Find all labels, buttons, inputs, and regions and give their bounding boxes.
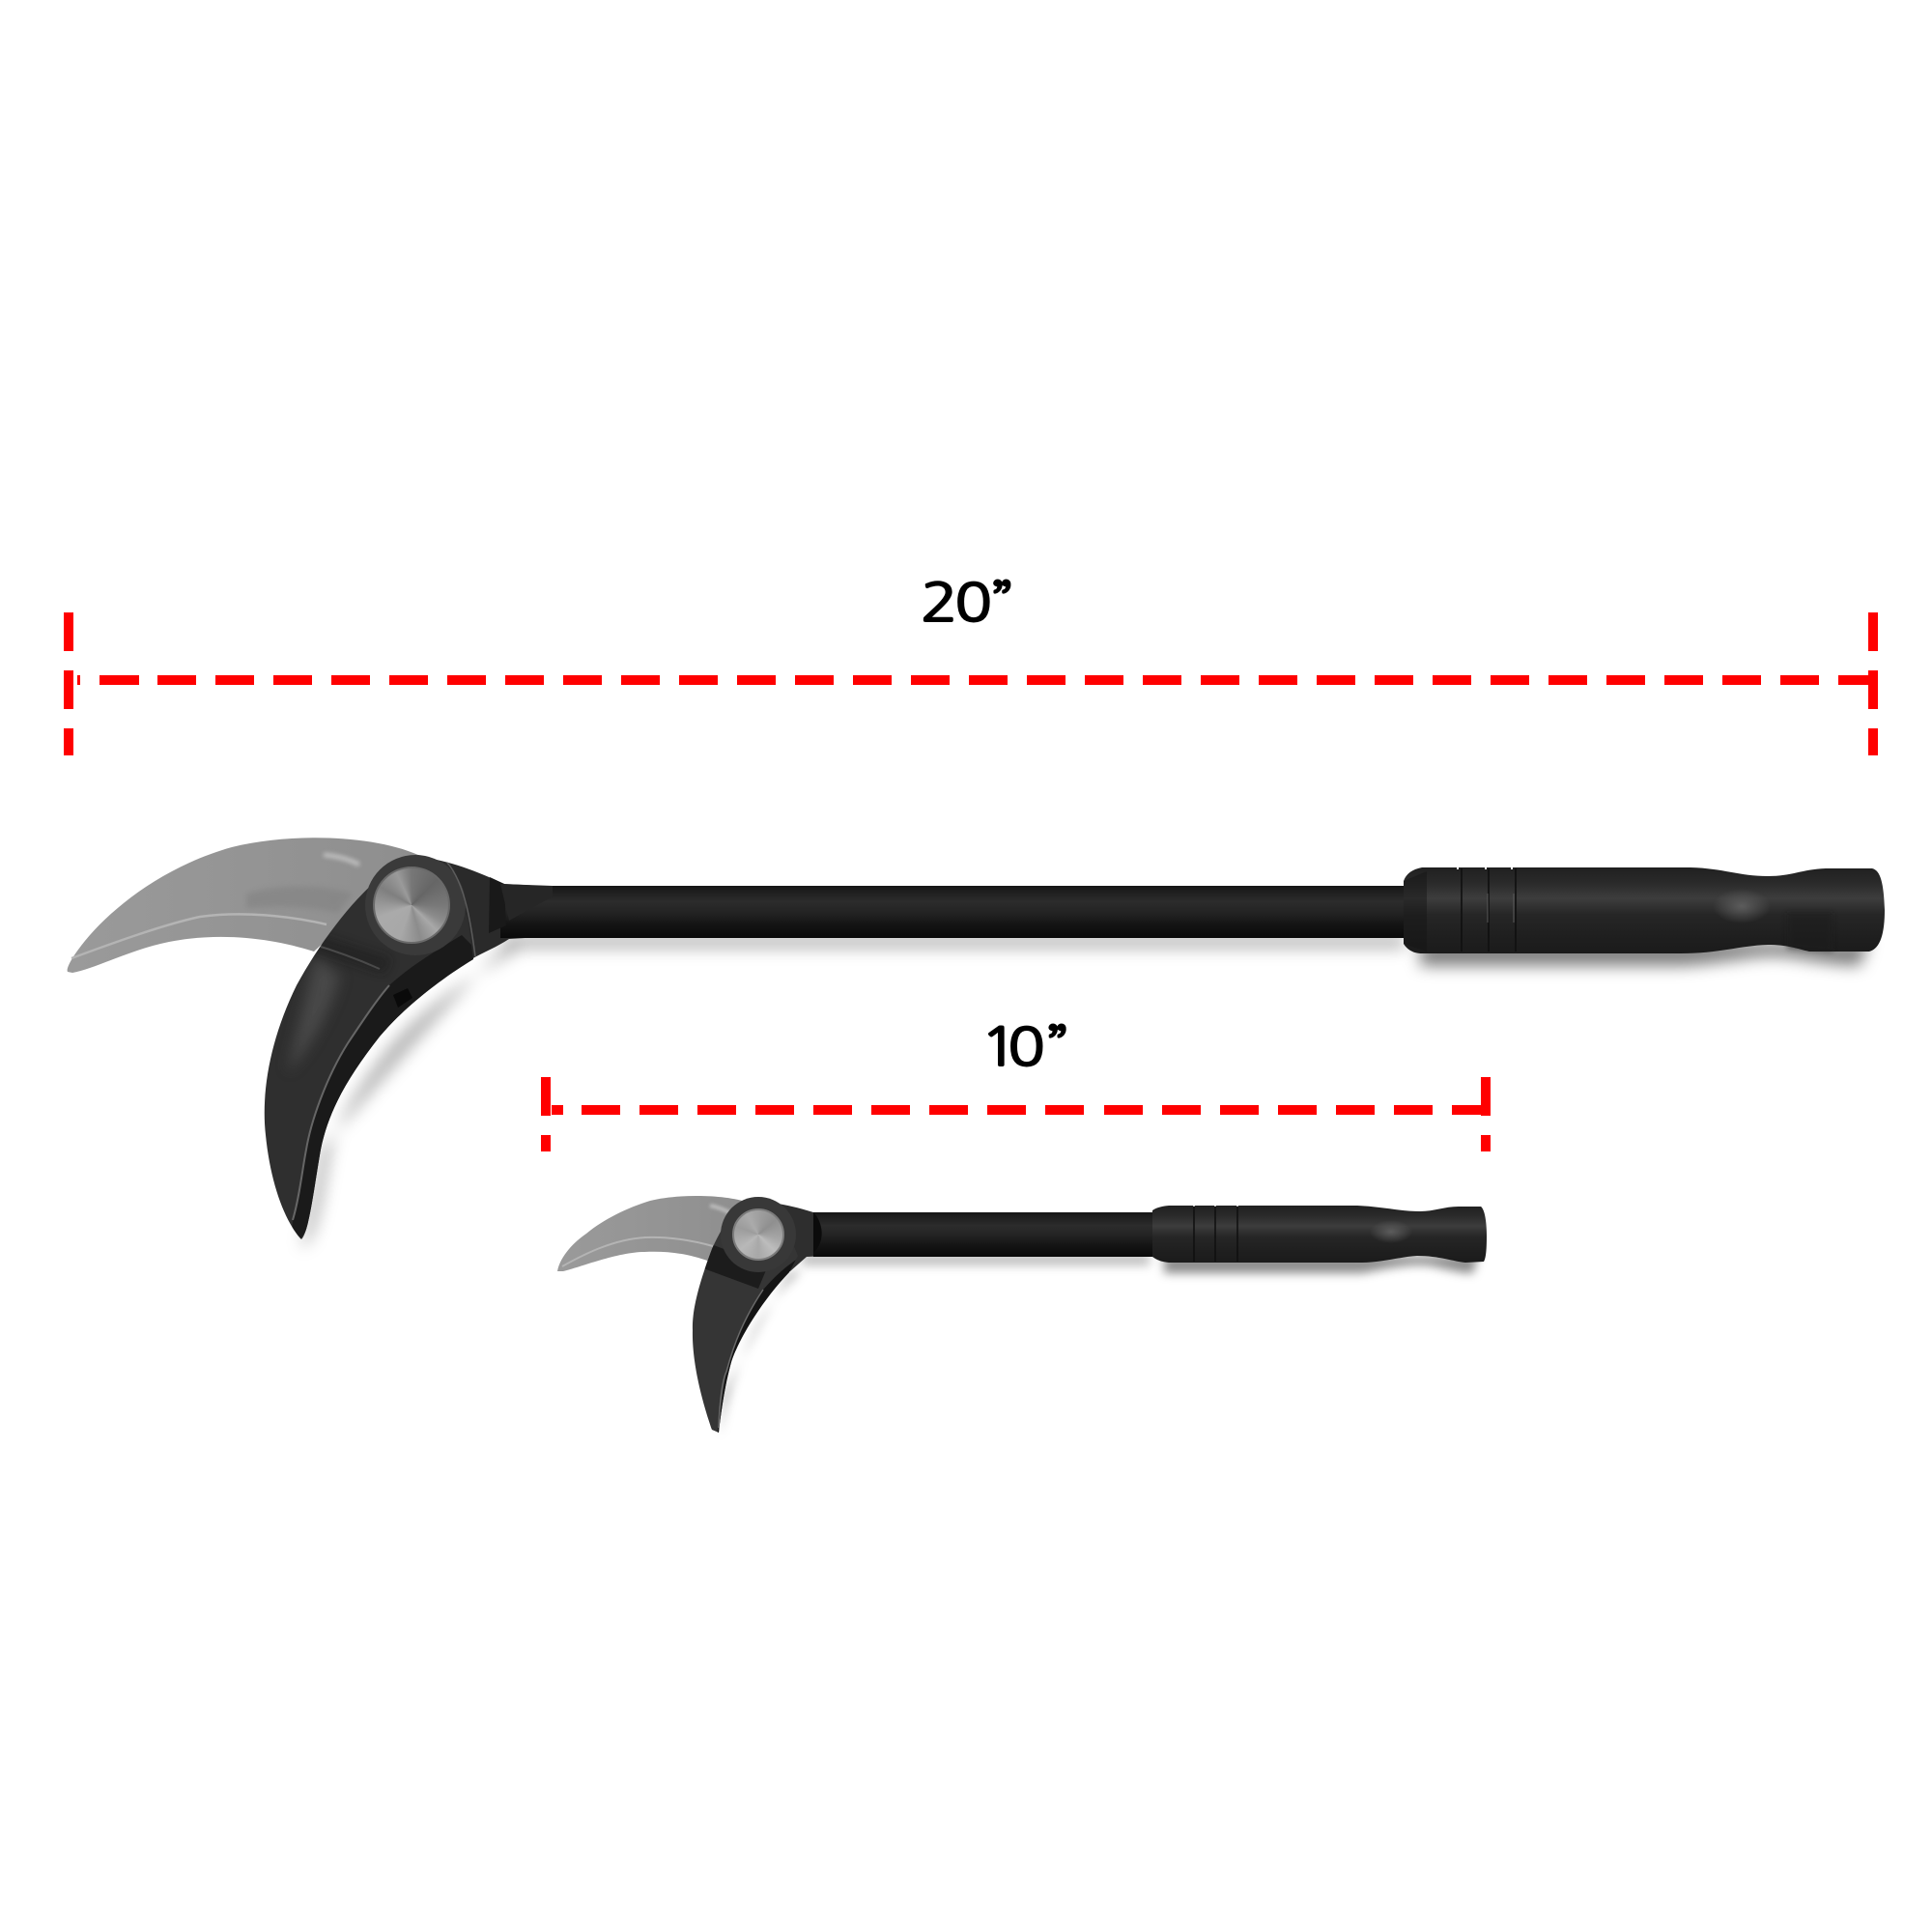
shaft collar: [813, 1212, 822, 1253]
dimension line: 20 inch: [64, 612, 1878, 755]
ghost blade: [68, 838, 418, 973]
tool: 20 inch pry bar: [68, 838, 1885, 1256]
lower dark strip: [292, 935, 473, 1238]
pivot disk: [732, 1208, 784, 1261]
blade: [265, 855, 483, 1256]
infographic canvas: [64, 580, 1885, 1433]
tool: 10 inch pry bar: [557, 1196, 1487, 1449]
label: 10 inch: ”: [1048, 1020, 1069, 1073]
shadow: [721, 1254, 1478, 1437]
grip: [1404, 865, 1885, 953]
pivot disk: [373, 867, 450, 944]
neck: [425, 858, 541, 966]
ghost blade: [557, 1196, 749, 1271]
dimension: 20 inch: [64, 576, 1878, 755]
neck facet: [500, 884, 553, 921]
neck: [753, 1202, 831, 1275]
label: 10 inch: 10: [980, 1020, 1045, 1073]
blade highlight: [291, 960, 340, 1061]
dimension: 10 inch: [541, 1020, 1491, 1151]
label: 20 inch: ”: [992, 576, 1014, 629]
neck dark step: [489, 877, 506, 933]
pivot boss: [721, 1197, 796, 1272]
label: 20 inch: 20: [921, 576, 992, 629]
dimension line: 10 inch: [541, 1077, 1491, 1151]
blade band: [316, 937, 384, 968]
blade: [693, 1201, 807, 1449]
grip: [1152, 1203, 1487, 1263]
pivot boss: [365, 855, 466, 955]
shaft: [813, 1212, 1155, 1257]
shaft: [500, 886, 1408, 938]
shadow: [301, 935, 1869, 1248]
